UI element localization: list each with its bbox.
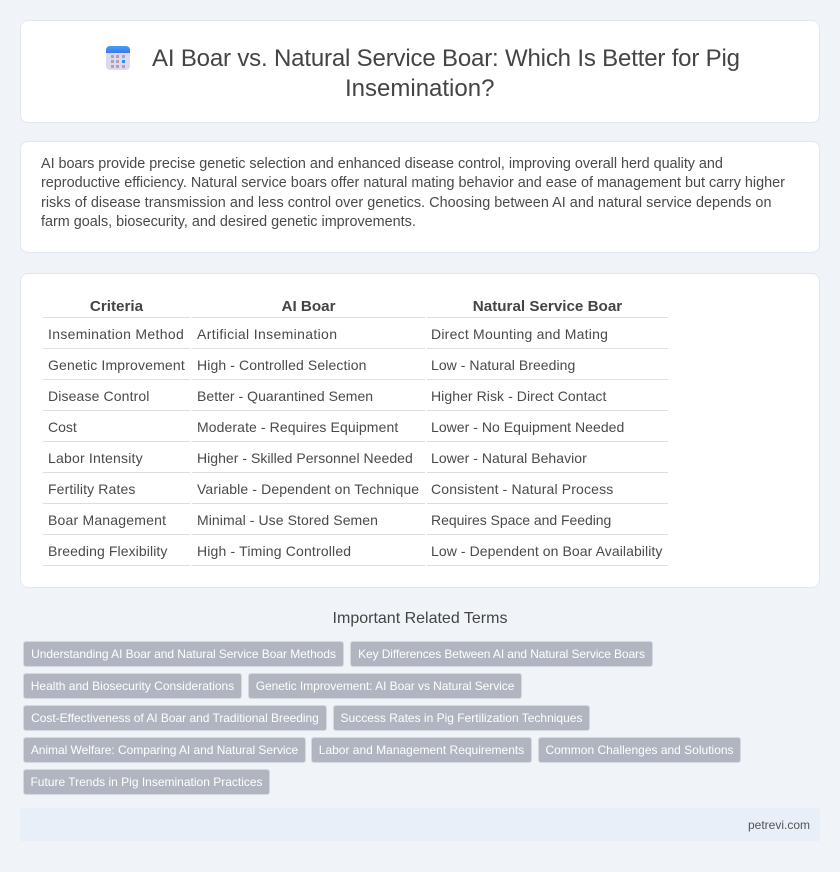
table: Consistent - Natural Process [431,481,613,497]
table: Artificial Insemination [197,326,337,342]
panel: comparison table [20,273,820,588]
related terms tags: Cost-Effectiveness of AI Boar and Traditional Breeding [31,711,319,725]
table: Higher - Skilled Personnel Needed [197,450,413,466]
title [152,45,740,102]
related terms tags: Understanding AI Boar and Natural Service Boar Methods [31,647,336,661]
table: Fertility Rates [48,481,136,497]
table: Requires Space and Feeding [431,512,611,528]
table: Moderate - Requires Equipment [197,419,398,435]
intro paragraph [41,156,785,230]
related terms tags: Health and Biosecurity Considerations [31,679,234,693]
related terms tags: Animal Welfare: Comparing AI and Natural Service [31,743,298,757]
related terms tags: Key Differences Between AI and Natural Service Boars [358,647,645,661]
table: Insemination Method [48,326,184,342]
table [43,298,668,566]
heading: related terms: Important Related Terms [333,610,507,627]
icon: calendar [106,46,130,70]
table: Genetic Improvement [48,357,185,373]
related terms tags [23,641,741,795]
table: Labor Intensity [48,450,143,466]
table: Variable - Dependent on Technique [197,481,419,497]
table: Disease Control [48,388,150,404]
table: AI Boar [281,298,336,315]
title: Insemination? [345,75,494,102]
table: Natural Service Boar [473,298,622,315]
table: High - Timing Controlled [197,543,351,559]
table: Direct Mounting and Mating [431,326,608,342]
related terms tags: Genetic Improvement: AI Boar vs Natural Service [256,679,514,693]
related terms tags: Labor and Management Requirements [319,743,524,757]
title: AI Boar vs. Natural Service Boar: Which Is Better for Pig [152,45,740,72]
table: Low - Dependent on Boar Availability [431,543,662,559]
table: Boar Management [48,512,166,528]
table: High - Controlled Selection [197,357,366,373]
table: Low - Natural Breeding [431,357,575,373]
table: Minimal - Use Stored Semen [197,512,378,528]
table: Criteria [90,298,143,315]
intro paragraph: AI boars provide precise genetic selection and enhanced disease control, improving overall herd quality and [41,156,723,172]
intro paragraph: farm goals, biosecurity, and desired genetic improvements. [41,214,416,230]
table: Breeding Flexibility [48,543,168,559]
table: Better - Quarantined Semen [197,388,373,404]
panel: title card [20,20,820,123]
panel: intro text [20,141,820,253]
related terms tags: Common Challenges and Solutions [545,743,734,757]
table: Cost [48,419,77,435]
footer source: petrevi.com [748,818,810,832]
footer [20,808,820,841]
table: Lower - No Equipment Needed [431,419,624,435]
related terms tags: Future Trends in Pig Insemination Practices [30,775,263,789]
table: Higher Risk - Direct Contact [431,388,606,404]
related terms tags: Success Rates in Pig Fertilization Techniques [341,711,582,725]
intro paragraph: reproductive efficiency. Natural service boars offer natural mating behavior and ease of management but carry higher [41,175,785,191]
intro paragraph: risks of disease transmission and less control over genetics. Choosing between AI and natural service depends on [41,195,772,211]
table: Lower - Natural Behavior [431,450,587,466]
